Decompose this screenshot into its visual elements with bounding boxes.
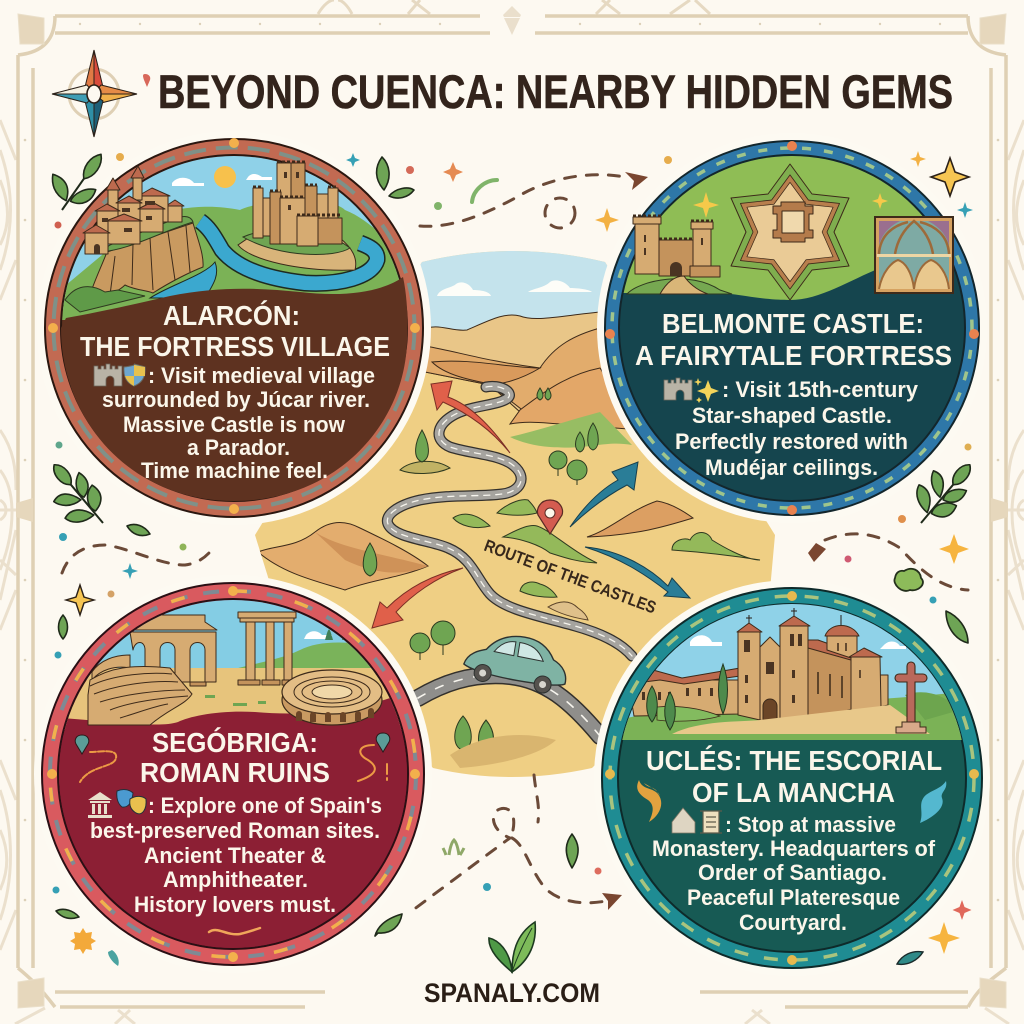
Uclés heading bbox=[646, 745, 942, 808]
map hills bbox=[426, 312, 598, 412]
Uclés scene bbox=[622, 604, 962, 740]
Segóbriga body text: : Explore one of Spain's bbox=[148, 793, 382, 818]
road bbox=[387, 386, 632, 736]
Uclés body text: Monastery. Headquarters of bbox=[652, 836, 936, 861]
map trees bbox=[363, 388, 598, 757]
icon: left route doodle bbox=[75, 735, 116, 782]
arrow: to Segóbriga bbox=[372, 568, 463, 628]
map green field bbox=[510, 412, 632, 448]
Segóbriga heading: ROMAN RUINS bbox=[140, 757, 330, 788]
sparkles bbox=[693, 192, 888, 218]
Segóbriga body text bbox=[90, 793, 382, 917]
arrowhead: top route bbox=[625, 172, 648, 190]
ring dots bbox=[47, 586, 420, 962]
Belmonte heading bbox=[635, 308, 952, 371]
icon: castle emoji bbox=[664, 378, 692, 400]
icon: shield bbox=[124, 364, 145, 386]
courtyard lawn bbox=[657, 706, 720, 721]
Segóbriga body text: History lovers must. bbox=[134, 892, 336, 917]
shield quarter bbox=[125, 365, 145, 386]
Segóbriga heading bbox=[140, 727, 330, 788]
ring dots bbox=[605, 141, 979, 515]
map lower shade bbox=[450, 735, 556, 768]
Uclés heading: OF LA MANCHA bbox=[692, 777, 895, 808]
icon: theatre masks bbox=[117, 790, 146, 814]
icon: chapel bbox=[672, 808, 695, 833]
panel: Uclés bbox=[594, 580, 990, 976]
Alarcón body text: surrounded by Júcar river. bbox=[102, 387, 370, 412]
castle bbox=[627, 216, 732, 294]
Belmonte heading: BELMONTE CASTLE: bbox=[662, 308, 924, 339]
star fortress bbox=[731, 164, 849, 300]
dashed route paths bbox=[62, 175, 968, 910]
scattered leaves bbox=[56, 157, 968, 966]
Belmonte body text: Mudéjar ceilings. bbox=[705, 455, 878, 480]
map green mounds bbox=[400, 461, 760, 597]
Segóbriga body text: best-preserved Roman sites. bbox=[90, 818, 380, 843]
Belmonte heading: A FAIRYTALE FORTRESS bbox=[635, 340, 952, 371]
Uclés body text: Peaceful Plateresque bbox=[687, 885, 900, 910]
Belmonte body text: Star-shaped Castle. bbox=[692, 403, 892, 428]
Alarcón body text: Time machine feel. bbox=[141, 458, 328, 483]
sprig: left middle bbox=[34, 454, 116, 540]
map: central landscape bbox=[255, 251, 775, 777]
icon: footer leaf bbox=[489, 922, 535, 972]
amphitheatre bbox=[282, 670, 382, 725]
arrowhead: right route bbox=[808, 543, 826, 562]
map left hill bbox=[258, 522, 428, 590]
arrow: to Uclés bbox=[585, 547, 690, 598]
sprig: top left bbox=[39, 138, 115, 220]
Uclés heading: UCLÉS: THE ESCORIAL bbox=[646, 745, 942, 776]
icon: vintage car bbox=[461, 628, 571, 696]
Segóbriga body text: Ancient Theater & bbox=[144, 843, 326, 868]
Segóbriga crimson panel bbox=[59, 698, 407, 948]
Uclés body text bbox=[652, 812, 936, 935]
icon: right route doodle bbox=[358, 733, 390, 781]
map rocks bbox=[548, 602, 588, 620]
Alarcón heading: THE FORTRESS VILLAGE bbox=[80, 331, 390, 362]
arrow: to Alarcón bbox=[431, 381, 510, 453]
sprig: right middle bbox=[901, 448, 983, 534]
Belmonte body text: : Visit 15th-century bbox=[722, 377, 919, 402]
icon: scroll bbox=[700, 811, 722, 833]
Alarcón body text: a Parador. bbox=[187, 435, 290, 460]
Uclés body text: : Stop at massive bbox=[725, 812, 896, 837]
map pin bbox=[538, 500, 562, 534]
Alarcón scene bbox=[62, 156, 399, 320]
sparkles and dots bbox=[52, 151, 973, 954]
map pin centre bbox=[545, 508, 555, 518]
panel: Alarcón bbox=[37, 131, 431, 525]
map clouds bbox=[437, 280, 592, 296]
route label: ROUTE OF THE CASTLES bbox=[482, 536, 659, 617]
Alarcón body text: Massive Castle is now bbox=[123, 412, 346, 437]
Alarcón brown panel bbox=[61, 277, 408, 501]
ring dots bbox=[48, 138, 420, 514]
grass tufts bbox=[205, 695, 266, 706]
arches bbox=[130, 615, 217, 686]
Alarcón heading bbox=[80, 300, 390, 362]
Uclés body text: Order of Santiago. bbox=[698, 860, 887, 885]
hill town bbox=[83, 166, 184, 254]
icon: classical building bbox=[88, 792, 112, 818]
icon: title pin mark bbox=[143, 74, 150, 87]
monastery bbox=[628, 608, 888, 724]
Belmonte body text bbox=[675, 377, 919, 480]
panel: Segóbriga bbox=[34, 575, 432, 973]
bottom flourish bbox=[209, 928, 260, 934]
Segóbriga body text: Amphitheater. bbox=[163, 867, 308, 892]
Alarcón heading: ALARCÓN: bbox=[163, 300, 300, 331]
courtyard ground bbox=[672, 705, 930, 734]
icon: sparkles bbox=[694, 378, 719, 403]
theatre bbox=[88, 655, 192, 725]
ring dots bbox=[605, 591, 979, 965]
footer brand: SPANALY.COM bbox=[424, 978, 600, 1008]
cross base bbox=[896, 722, 926, 733]
Segóbriga scene bbox=[59, 600, 407, 948]
panel: Belmonte bbox=[597, 120, 987, 523]
icon: compass rose bbox=[52, 50, 137, 137]
Alarcón body text: : Visit medieval village bbox=[148, 363, 375, 388]
Segóbriga heading: SEGÓBRIGA: bbox=[152, 727, 318, 758]
Belmonte scene bbox=[624, 156, 922, 300]
castle bbox=[253, 162, 342, 246]
cliff bbox=[65, 216, 203, 312]
cypress trees bbox=[647, 664, 728, 730]
icon: blue flame bbox=[920, 781, 946, 823]
arrowhead: bottom route bbox=[602, 893, 622, 910]
Mudéjar ceiling bbox=[875, 217, 953, 293]
map right hill bbox=[587, 501, 693, 537]
stone cross bbox=[895, 662, 927, 722]
icon: castle emoji bbox=[94, 364, 122, 386]
arrow: to Belmonte bbox=[570, 462, 638, 527]
Belmonte body text: Perfectly restored with bbox=[675, 429, 908, 454]
columns bbox=[238, 612, 296, 685]
Uclés body text: Courtyard. bbox=[739, 910, 847, 935]
Alarcón body text bbox=[102, 363, 375, 483]
map sky bbox=[420, 251, 608, 330]
icon: orange flame bbox=[637, 780, 661, 822]
